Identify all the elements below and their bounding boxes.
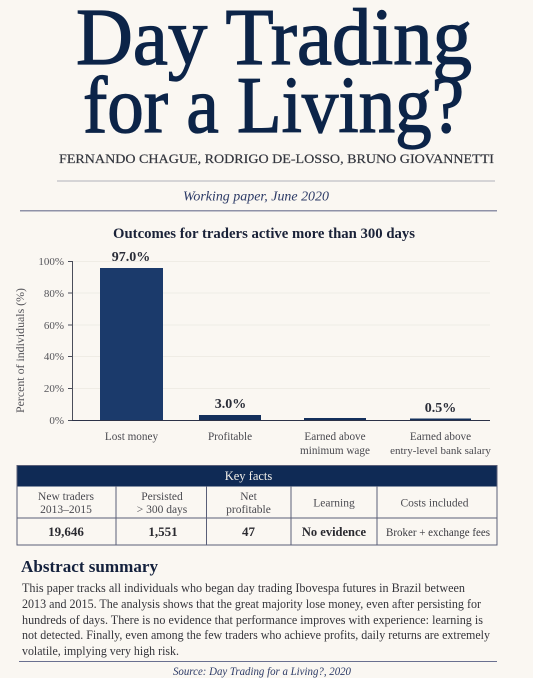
table column headings: Persisted	[141, 491, 183, 503]
table grid	[17, 466, 497, 545]
footer rule	[19, 661, 497, 662]
value labels: 3.0%	[215, 397, 246, 412]
title: for a Living?	[83, 60, 464, 150]
source note: Source: Day Trading for a Living?, 2020	[173, 664, 351, 678]
y tick labels: 0%	[49, 415, 64, 427]
value labels	[112, 250, 456, 416]
abstract heading: Abstract summary	[21, 557, 158, 576]
authors: FERNANDO CHAGUE, RODRIGO DE-LOSSO, BRUNO GIOVANNETTI	[59, 151, 494, 166]
abstract paragraph: 2013 and 2015. The analysis shows that the great majority lose money, even after persisting for	[22, 597, 482, 611]
section rule	[20, 210, 497, 212]
x category labels: minimum wage	[300, 445, 370, 457]
table column headings	[38, 491, 469, 516]
y tick labels: 60%	[44, 320, 64, 332]
chart title: Outcomes for traders active more than 300 days	[113, 226, 415, 242]
title	[76, 0, 472, 150]
table column headings: Learning	[313, 498, 355, 510]
table header	[17, 466, 497, 486]
x category labels: Profitable	[208, 431, 252, 443]
y axis title: Percent of individuals (%)	[13, 288, 27, 413]
bar chart	[13, 226, 491, 457]
table column headings: profitable	[226, 504, 271, 516]
abstract paragraph	[22, 581, 491, 658]
x category labels: entry-level bank salary	[390, 445, 491, 457]
abstract paragraph: volatile, implying very high risk.	[22, 644, 179, 658]
y tick labels: 100%	[38, 256, 64, 268]
abstract paragraph: This paper tracks all individuals who began day trading Ibovespa futures in Brazil between	[22, 581, 466, 595]
key facts table	[17, 466, 497, 545]
table values: No evidence	[302, 525, 367, 539]
header rule	[57, 180, 495, 182]
x category labels	[105, 431, 491, 457]
abstract paragraph: not detected. Finally, even among the few traders who achieve profits, daily returns are extremely	[22, 628, 491, 642]
grid lines	[72, 262, 490, 388]
table values: 19,646	[48, 524, 84, 539]
table column headings: > 300 days	[137, 504, 188, 516]
value labels: 0.5%	[425, 401, 456, 416]
y tick labels: 40%	[44, 351, 64, 363]
table column headings: 2013–2015	[40, 504, 92, 516]
y tick labels	[38, 256, 64, 427]
y tick labels: 20%	[44, 383, 64, 395]
x axis	[72, 420, 490, 421]
table values: 1,551	[148, 524, 178, 539]
table values	[48, 524, 367, 539]
bar: lost money	[100, 268, 163, 420]
abstract paragraph: hundreds of days. There is no evidence that performance improves with experience: learning is	[22, 613, 483, 627]
table column headings: Costs included	[400, 498, 469, 510]
x category labels: Earned above	[410, 431, 471, 443]
x category labels: Earned above	[304, 431, 366, 443]
y tick labels: 80%	[44, 288, 64, 300]
costs value: Broker + exchange fees	[386, 527, 490, 539]
table column headings: New traders	[38, 491, 94, 503]
y axis	[68, 261, 72, 420]
publication note: Working paper, June 2020	[183, 188, 329, 204]
bar: minimum wage	[304, 418, 366, 420]
bar: profitable	[199, 415, 261, 420]
value labels: 97.0%	[112, 250, 150, 265]
table values: 47	[242, 524, 256, 539]
x category labels: Lost money	[105, 431, 158, 443]
table header text: Key facts	[225, 469, 272, 483]
table column headings: Net	[240, 491, 258, 503]
bar: bank salary	[410, 418, 471, 420]
